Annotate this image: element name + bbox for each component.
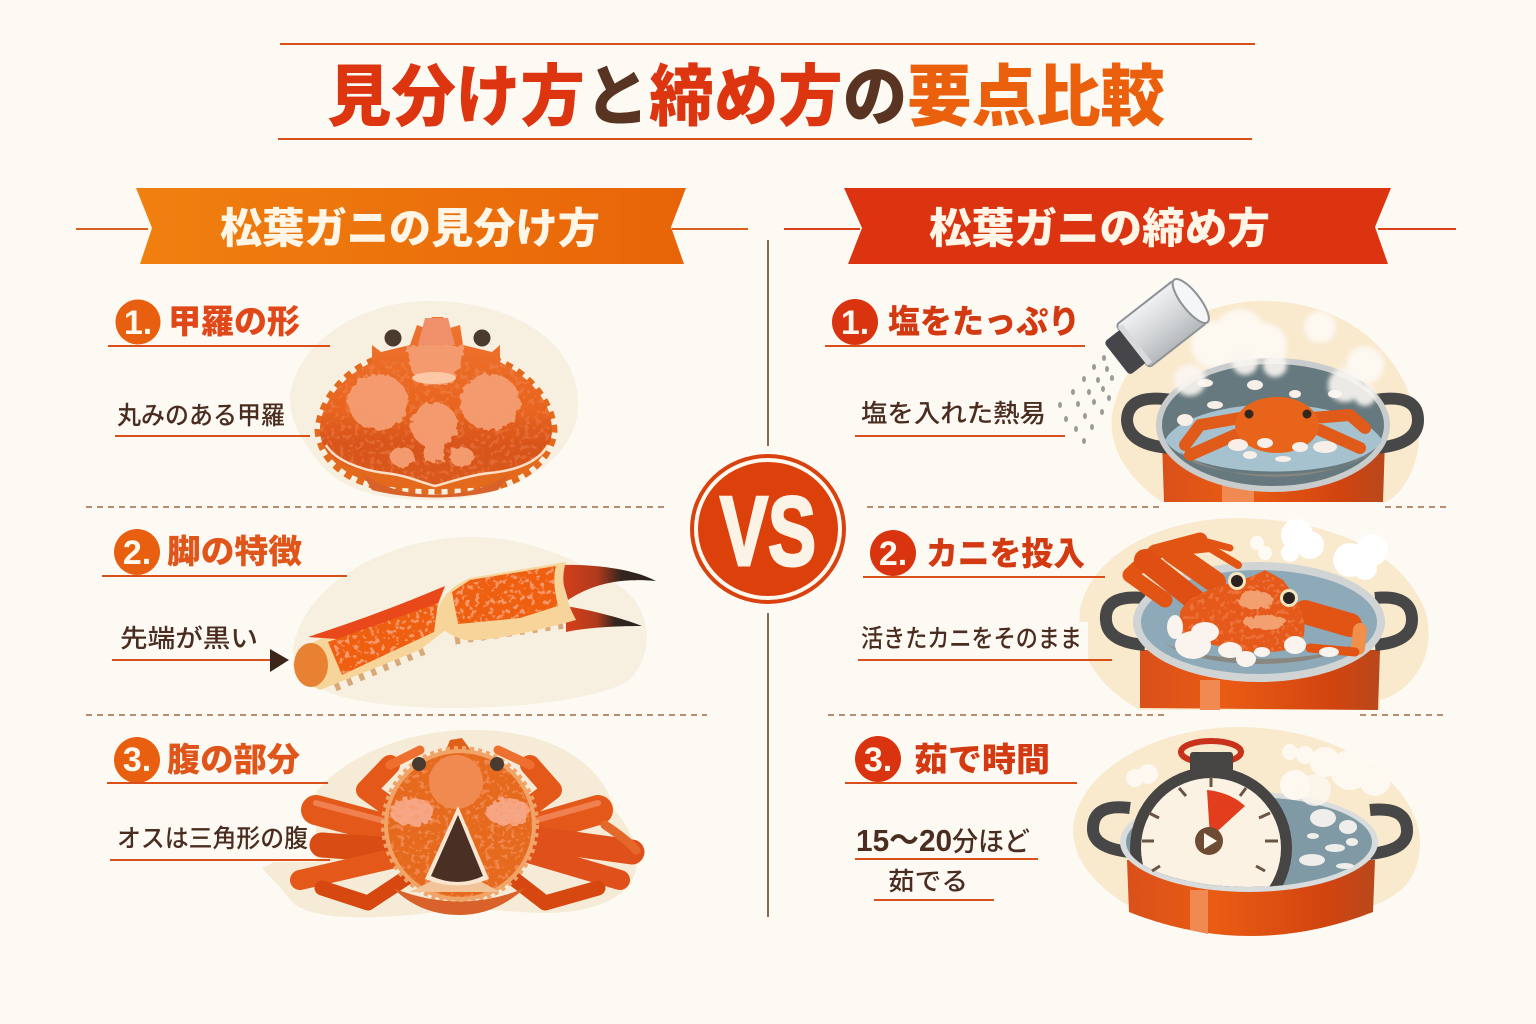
panel: right 2 crab into pot xyxy=(856,518,1429,710)
icon: timer xyxy=(1130,738,1292,887)
label backing xyxy=(856,622,1088,660)
step number 3: 3. xyxy=(123,741,151,779)
panel: left 2 claw xyxy=(102,529,656,708)
step number 2 xyxy=(114,529,160,575)
step number 2: 2. xyxy=(123,534,151,572)
step number 1 xyxy=(116,300,160,344)
step number 3: 3. xyxy=(864,741,892,779)
icon: steam xyxy=(1250,519,1388,580)
backdrop blob xyxy=(1073,727,1420,905)
backdrop blob xyxy=(1079,518,1429,710)
icon: pot xyxy=(1093,792,1407,936)
icon: steam xyxy=(1126,744,1391,806)
step number 3 xyxy=(114,737,160,783)
step heading: カニを投入 xyxy=(926,535,1085,572)
icon: bubbles xyxy=(1177,379,1342,462)
icon: bubbles xyxy=(1167,615,1339,667)
step heading: 塩をたっぷり xyxy=(888,303,1080,340)
section dividers xyxy=(86,507,1448,715)
description: オスは三角形の腹 xyxy=(117,825,308,853)
step number 1 xyxy=(832,299,878,345)
step number 3 xyxy=(855,736,901,782)
VS badge xyxy=(690,454,846,604)
step number 1: 1. xyxy=(124,304,152,342)
step heading: 茹で時間 xyxy=(914,741,1050,778)
center divider xyxy=(767,240,769,917)
step number 2: 2. xyxy=(879,535,907,573)
left banner heading xyxy=(76,188,748,264)
description: 丸みのある甲羅 xyxy=(117,402,285,430)
description line 1: 15〜20分ほど xyxy=(856,823,1030,858)
left banner heading: 松葉ガニの見分け方 xyxy=(220,205,600,252)
icon: crab claw xyxy=(293,562,656,690)
icon: crab in pot xyxy=(1185,397,1365,455)
icon: whole crab xyxy=(300,738,636,915)
arrow xyxy=(270,649,289,672)
icon: salt shaker xyxy=(1100,274,1214,380)
description: 活きたカニをそのまま xyxy=(861,625,1082,653)
title block: 見分け方と締め方の要点比較 xyxy=(327,60,1165,135)
description: 先端が黒い xyxy=(120,625,258,653)
description line 2: 茹でる xyxy=(888,868,968,896)
backdrop blob xyxy=(1112,301,1419,502)
backdrop blob xyxy=(262,730,637,917)
step heading: 腹の部分 xyxy=(167,741,300,778)
panel: left 1 carapace xyxy=(108,300,578,500)
panel: right 1 salt xyxy=(825,274,1419,502)
right banner heading: 松葉ガニの締め方 xyxy=(929,205,1270,252)
step heading: 脚の特徴 xyxy=(167,533,302,570)
step number 1: 1. xyxy=(841,304,869,342)
step number 2 xyxy=(870,530,916,576)
right banner heading xyxy=(784,188,1456,264)
icon: steam over rim xyxy=(1174,349,1376,406)
icon: pot xyxy=(1106,562,1412,710)
icon: bubbles xyxy=(1299,809,1358,869)
description: 塩を入れた熱易 xyxy=(861,400,1046,428)
icon: pot xyxy=(1127,358,1418,502)
panel: right 3 timer xyxy=(845,727,1420,936)
icon: crab entering pot xyxy=(1130,540,1360,652)
step heading: 甲羅の形 xyxy=(168,303,300,340)
icon: crab carapace xyxy=(320,317,552,498)
panel: left 3 crab underside xyxy=(107,730,637,917)
backdrop blob xyxy=(290,301,578,500)
icon: steam xyxy=(1191,309,1384,384)
VS badge: VS xyxy=(720,476,816,586)
backdrop blob xyxy=(293,537,647,708)
label backing xyxy=(108,818,316,862)
icon: salt grains xyxy=(1058,355,1114,444)
